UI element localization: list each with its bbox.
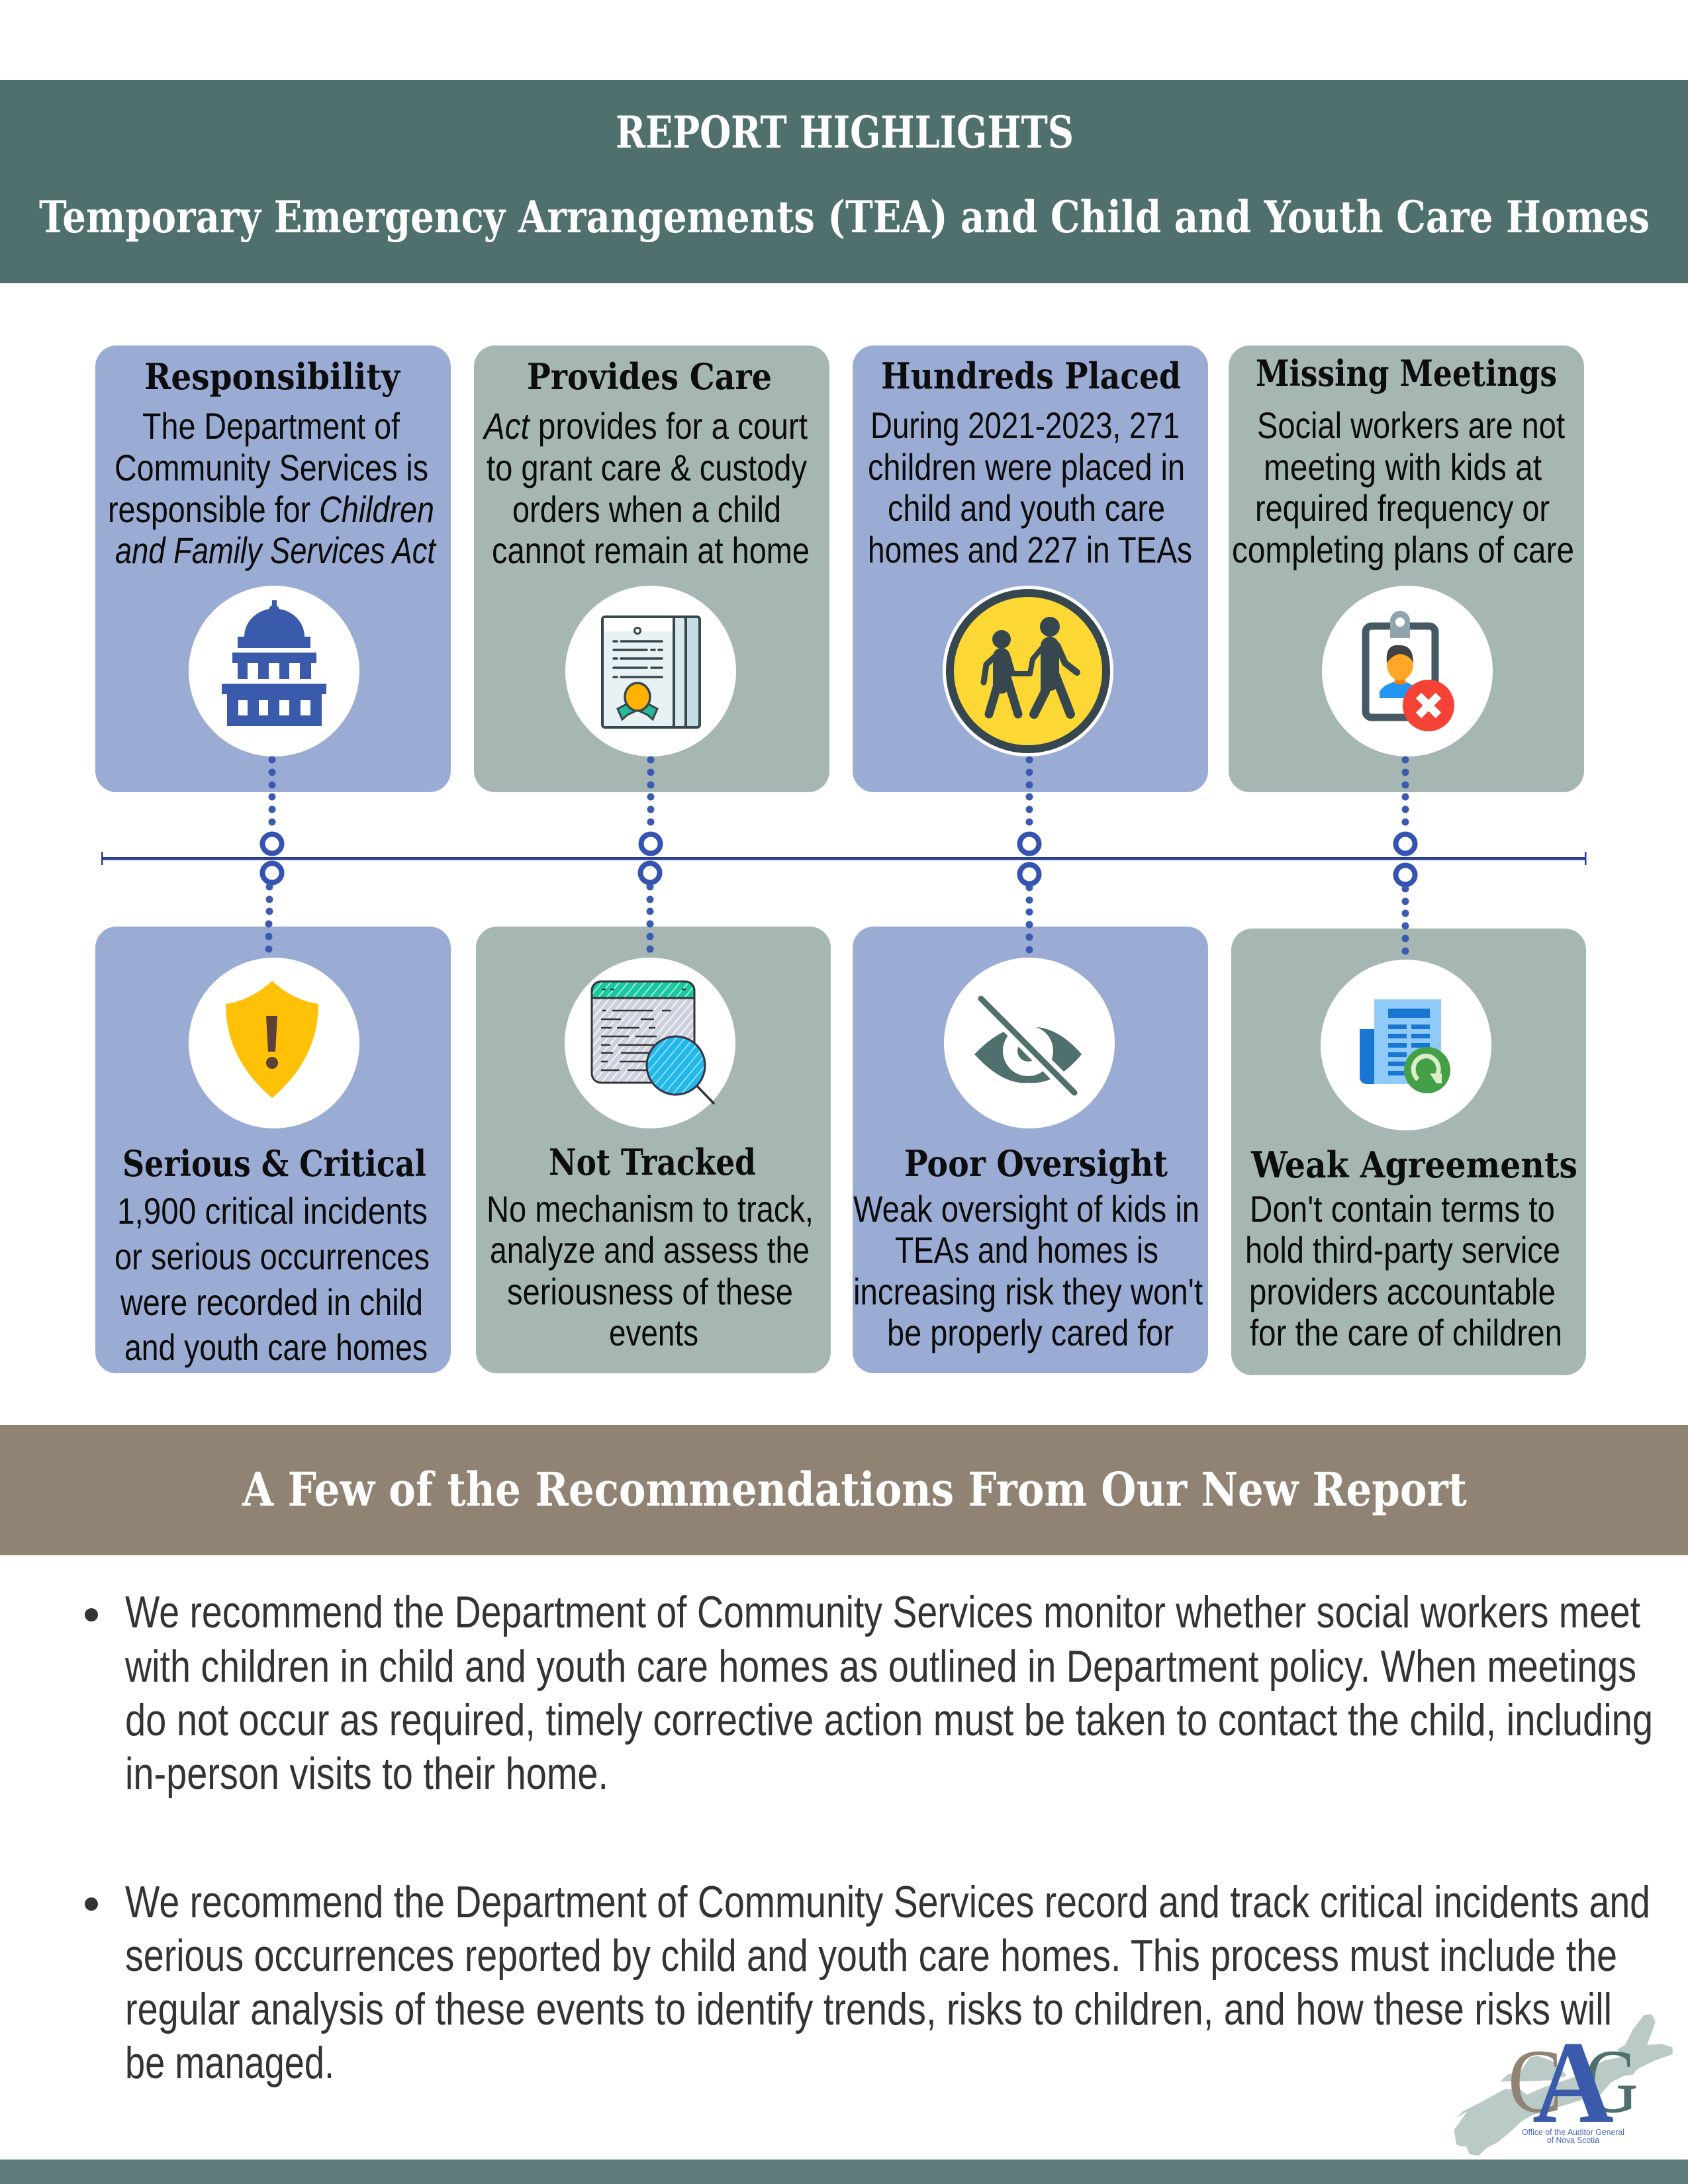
connector: responsibility to timeline: [262, 756, 282, 854]
icon: crossed-out eye: [944, 958, 1115, 1128]
body text: [487, 1188, 814, 1353]
logo: Office of the Auditor General of Nova Scotia: of Nova Scotia: [1547, 2136, 1599, 2145]
body text: child and youth care: [888, 487, 1165, 529]
body text: homes and 227 in TEAs: [868, 529, 1192, 570]
panel: poor oversight: [853, 927, 1208, 1373]
body text: orders when a child: [512, 488, 781, 530]
heading: Provides Care: [527, 355, 772, 398]
heading: Poor Oversight: [904, 1142, 1168, 1185]
body text: During 2021-2023, 271: [870, 404, 1180, 446]
body text: children were placed in: [868, 446, 1185, 488]
connector: weak agreements to timeline: [1395, 866, 1415, 954]
heading: Serious & Critical: [122, 1142, 426, 1185]
body text: required frequency or: [1255, 487, 1550, 529]
header banner: [0, 80, 1688, 283]
map of Nova Scotia: [1451, 2014, 1673, 2156]
icon: clipboard with missing person: [1322, 586, 1493, 756]
body text: events: [609, 1312, 698, 1353]
body text: TEAs and homes is: [895, 1229, 1158, 1271]
logo: Office of the Auditor General of Nova Scotia: [1451, 2014, 1673, 2156]
body text: meeting with kids at: [1264, 446, 1542, 488]
body text: analyze and assess the: [490, 1229, 810, 1271]
icon: children crossing sign: [943, 586, 1113, 756]
connector: provides care to timeline: [641, 756, 661, 854]
heading: Hundreds Placed: [881, 355, 1181, 397]
icon: warning shield: [189, 958, 359, 1128]
body text: [868, 404, 1192, 570]
body text: or serious occurrences: [115, 1236, 430, 1277]
text block: [125, 1877, 1650, 2088]
footer band: [0, 2160, 1688, 2184]
connector: serious and critical to timeline: [262, 863, 282, 953]
text block: [124, 1587, 1653, 1799]
logo: Office of the Auditor General of Nova Scotia: C: [1508, 2030, 1562, 2132]
bullet: [85, 1608, 98, 1621]
heading: Not Tracked: [549, 1141, 756, 1183]
body text: providers accountable: [1249, 1271, 1556, 1312]
body text: [1232, 404, 1574, 570]
recommendation 1: [85, 1587, 1653, 1799]
body text: No mechanism to track,: [487, 1188, 814, 1230]
body text: seriousness of these: [507, 1271, 793, 1312]
body text: Act provides for a court: [482, 405, 808, 447]
icon: certificate document: [565, 586, 736, 756]
connector: not tracked to timeline: [641, 863, 659, 953]
panel: hundreds placed: [853, 345, 1208, 792]
bullet: [85, 1897, 98, 1911]
body text: Don't contain terms to: [1250, 1188, 1555, 1230]
icon: document under magnifier: [565, 958, 735, 1128]
body text: The Department of: [142, 405, 400, 447]
panel: missing meetings: [1229, 345, 1584, 792]
body text: to grant care & custody: [487, 447, 807, 488]
recommendation 2: [85, 1877, 1650, 2088]
heading: Responsibility: [144, 355, 400, 398]
body text: [482, 405, 810, 571]
body text: for the care of children: [1250, 1312, 1562, 1353]
panel: responsibility: [95, 345, 451, 792]
logo: Office of the Auditor General of Nova Scotia: G: [1584, 2030, 1638, 2132]
title: report highlights: REPORT HIGHLIGHTS: [616, 107, 1074, 158]
body text: [108, 405, 437, 571]
icon: newspaper with renew badge: [1321, 960, 1491, 1130]
icon: capitol building: [189, 586, 359, 756]
connector: poor oversight to timeline: [1019, 864, 1039, 953]
panel: not tracked: [476, 927, 831, 1373]
logo: Office of the Auditor General of Nova Scotia: A: [1532, 2017, 1614, 2148]
connector: missing meetings to timeline: [1395, 756, 1415, 854]
timeline axis: [101, 852, 1586, 865]
body text: cannot remain at home: [492, 529, 810, 571]
body text: hold third-party service: [1245, 1229, 1560, 1271]
heading: A Few of the Recommendations From Our New Report: [242, 1462, 1467, 1517]
connector: hundreds placed to timeline: [1019, 756, 1039, 854]
body text: increasing risk they won't: [853, 1271, 1203, 1312]
body text: responsible for Children: [108, 488, 434, 530]
panel: serious and critical: [95, 927, 451, 1373]
panel: provides care: [474, 345, 829, 792]
body text: completing plans of care: [1232, 529, 1574, 570]
body text: and youth care homes: [124, 1326, 428, 1368]
body text: were recorded in child: [120, 1281, 423, 1323]
body text: and Family Services Act: [115, 529, 437, 571]
heading: Weak Agreements: [1250, 1144, 1577, 1186]
body text: Weak oversight of kids in: [853, 1188, 1199, 1230]
recommendations banner: [0, 1425, 1688, 1555]
body text: [853, 1188, 1203, 1353]
body text: Community Services is: [115, 447, 428, 488]
body text: be properly cared for: [887, 1312, 1174, 1353]
body text: [115, 1190, 430, 1368]
body text: Social workers are not: [1257, 404, 1565, 446]
text block: be managed.: [125, 2038, 334, 2088]
logo: Office of the Auditor General of Nova Scotia: Office of the Auditor General: [1522, 2128, 1624, 2137]
body text: [1245, 1188, 1562, 1353]
panel: weak agreements: [1231, 929, 1586, 1375]
text block: in-person visits to their home.: [125, 1749, 608, 1799]
body text: 1,900 critical incidents: [117, 1190, 428, 1232]
heading: Missing Meetings: [1256, 352, 1557, 394]
